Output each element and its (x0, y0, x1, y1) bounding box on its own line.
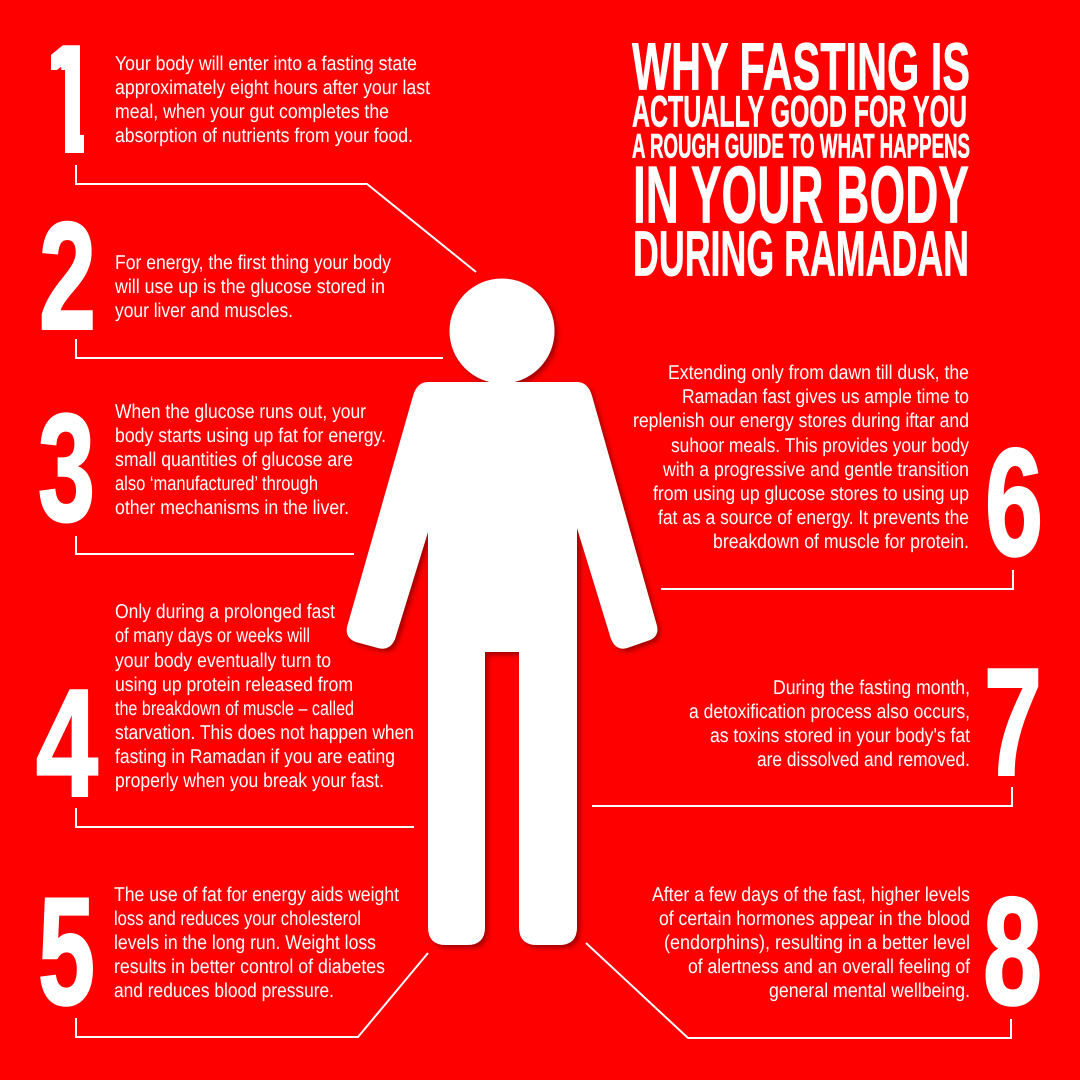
text block 3: other mechanisms in the liver. (115, 497, 349, 519)
text block 1 (115, 53, 430, 147)
text block 5 (114, 884, 399, 1002)
text block 5: The use of fat for energy aids weight (114, 884, 399, 906)
text block 7: as toxins stored in your body's fat (710, 725, 970, 747)
text block 5: results in better control of diabetes (114, 956, 385, 978)
text block 3: body starts using up fat for energy. (115, 425, 386, 447)
number 3: 3 (38, 382, 95, 554)
text block 4 (115, 601, 414, 792)
text block 8: After a few days of the fast, higher levels (652, 884, 970, 906)
text block 2: For energy, the first thing your body (115, 252, 391, 274)
number 1: 1 (34, 14, 102, 185)
title (632, 30, 970, 290)
text block 3: When the glucose runs out, your (115, 401, 366, 423)
text block 3: small quantities of glucose are (115, 449, 353, 471)
text block 7: a detoxification process also occurs, (689, 701, 970, 723)
number 2: 2 (39, 191, 96, 362)
text block 1: Your body will enter into a fasting state (115, 53, 417, 75)
text block 4: your body eventually turn to (115, 650, 331, 672)
text block 4: starvation. This does not happen when (115, 722, 414, 744)
text block 5: loss and reduces your cholesterol (114, 908, 361, 930)
human figure (347, 278, 657, 945)
text block 6: fat as a source of energy. It prevents the (658, 507, 969, 529)
text block 5: levels in the long run. Weight loss (114, 932, 376, 954)
text block 8 (652, 884, 970, 1002)
number 4: 4 (36, 658, 98, 829)
text block 1: approximately eight hours after your last (115, 77, 430, 99)
text block 3 (115, 401, 386, 519)
text block 6: suhoor meals. This provides your body (671, 435, 969, 457)
number 5: 5 (38, 866, 95, 1037)
text block 7 (689, 677, 970, 771)
text block 1: meal, when your gut completes the (115, 101, 389, 123)
text block 4: using up protein released from (115, 674, 353, 696)
text block 4: fasting in Ramadan if you are eating (115, 746, 395, 768)
text block 2: your liver and muscles. (115, 300, 293, 322)
number 6: 6 (985, 417, 1043, 588)
text block 7: During the fasting month, (773, 677, 970, 699)
number 7: 7 (984, 637, 1042, 808)
text block 6: from using up glucose stores to using up (653, 483, 969, 505)
text block 6: replenish our energy stores during iftar and (633, 410, 969, 432)
text block 2: will use up is the glucose stored in (114, 276, 385, 298)
text block 1: absorption of nutrients from your food. (115, 125, 413, 147)
connector lines (76, 165, 1013, 1038)
text block 4: Only during a prolonged fast (115, 601, 335, 623)
text block 8: of alertness and an overall feeling of (688, 956, 970, 978)
text block 6: Ramadan fast gives us ample time to (682, 386, 969, 408)
text block 2 (114, 252, 391, 322)
text block 8: of certain hormones appear in the blood (659, 908, 970, 930)
text block 4: of many days or weeks will (115, 625, 310, 647)
text block 8: (endorphins), resulting in a better level (664, 932, 970, 954)
text block 6: breakdown of muscle for protein. (713, 531, 969, 553)
text block 8: general mental wellbeing. (769, 980, 970, 1002)
text block 6: with a progressive and gentle transition (662, 459, 969, 481)
text block 6: Extending only from dawn till dusk, the (668, 362, 969, 384)
text block 6 (633, 362, 969, 553)
text block 7: are dissolved and removed. (757, 749, 970, 771)
text block 4: properly when you break your fast. (115, 770, 384, 792)
text block 4: the breakdown of muscle – called (115, 698, 354, 720)
number 8: 8 (983, 866, 1042, 1037)
text block 3: also ‘manufactured’ through (115, 473, 318, 495)
text block 5: and reduces blood pressure. (114, 980, 334, 1002)
